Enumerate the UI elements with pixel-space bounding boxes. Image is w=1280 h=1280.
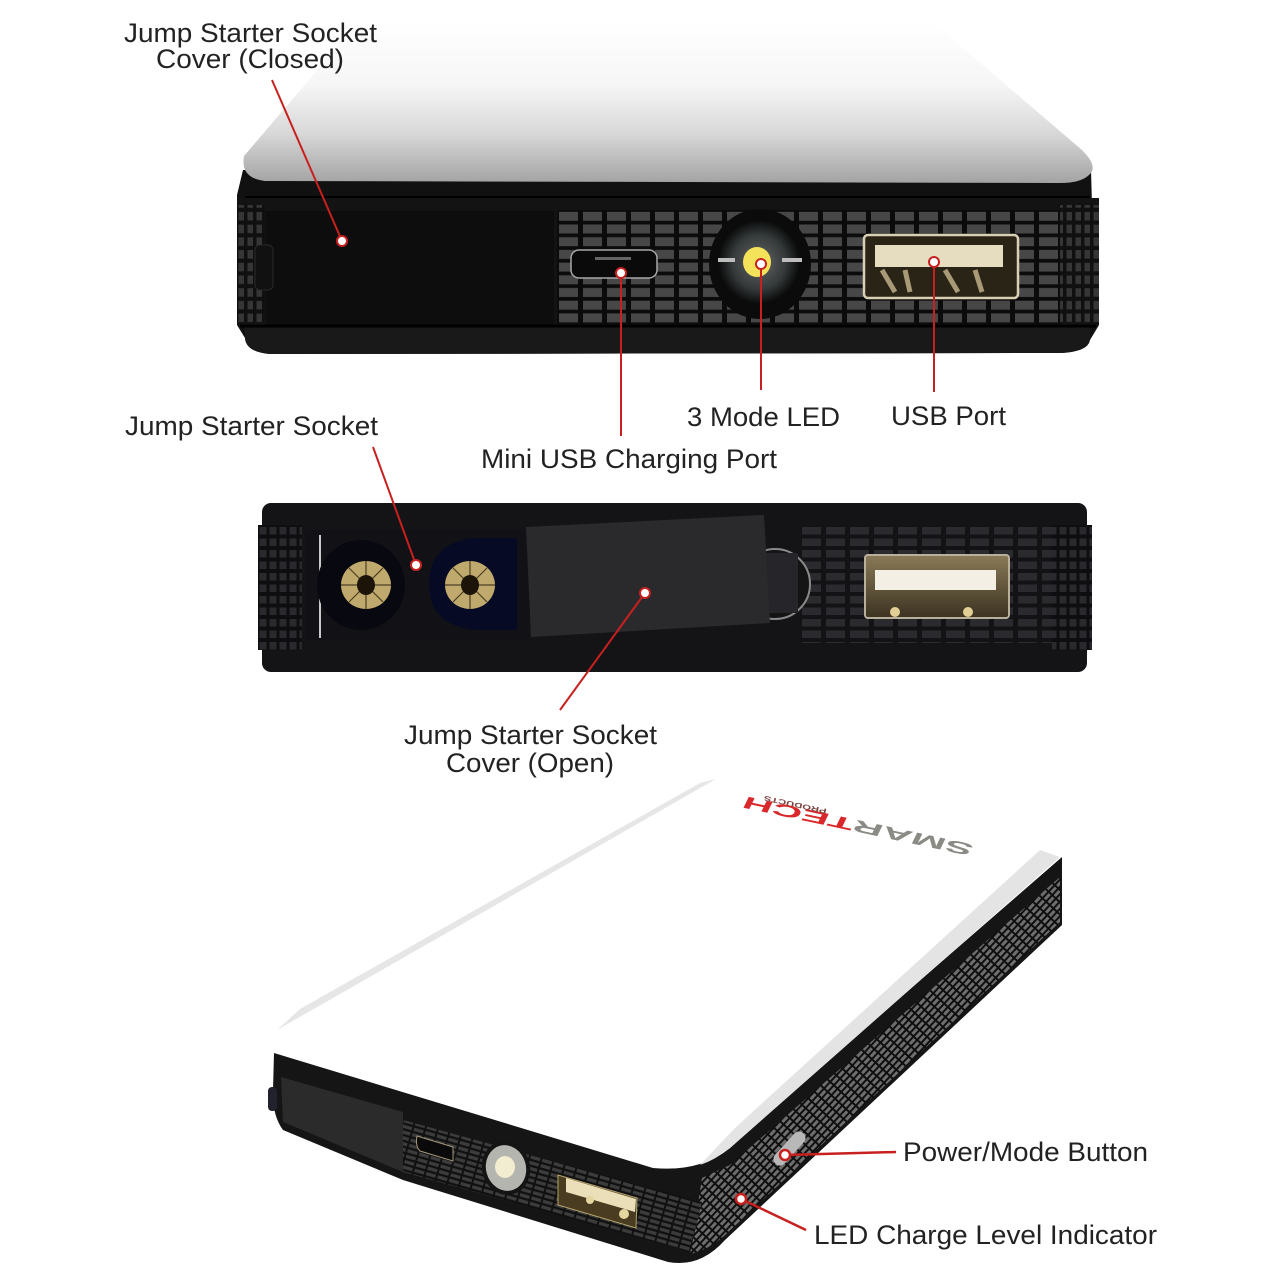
callout line: mini USB <box>616 268 626 436</box>
label: jump starter socket: Jump Starter Socket <box>125 411 379 441</box>
black body <box>273 857 1062 1263</box>
cover tab <box>255 245 273 290</box>
callout line: power button <box>780 1150 896 1160</box>
logo <box>739 793 977 860</box>
label: socket cover closed: Cover (Closed) <box>156 44 344 74</box>
label: mini USB: Mini USB Charging Port <box>481 444 778 474</box>
micro usb port <box>571 250 657 278</box>
label: socket cover open: Jump Starter Socket <box>404 720 658 750</box>
right gray edge strip <box>700 850 1060 1165</box>
lower bumper <box>245 326 1090 354</box>
label: socket cover closed: Jump Starter Socket <box>124 18 378 48</box>
LED lens <box>709 209 811 319</box>
USB port <box>864 235 1018 298</box>
front grille <box>403 1120 702 1252</box>
ribbed sides <box>258 525 302 650</box>
label: power button: Power/Mode Button <box>903 1137 1148 1167</box>
cover tab <box>268 1087 277 1111</box>
logo: SMARTECH <box>739 793 977 860</box>
body <box>262 503 1087 672</box>
device: front view open cover <box>258 503 1092 672</box>
right side grille <box>690 877 1060 1254</box>
grille <box>800 525 1052 643</box>
LED ring behind flap <box>740 549 810 619</box>
label: socket cover open: Cover (Open) <box>446 748 614 778</box>
LED <box>476 1136 536 1200</box>
socket recess <box>305 530 530 640</box>
callout line: LED <box>756 259 766 390</box>
right socket <box>429 538 517 630</box>
top surface of device <box>243 20 1093 183</box>
label: 3 mode LED: 3 Mode LED <box>687 402 840 432</box>
white top shell <box>275 778 1060 1167</box>
USB port <box>558 1175 637 1228</box>
label: socket cover open <box>404 720 658 778</box>
device: angled view <box>268 778 1062 1263</box>
callout line: cover open <box>560 588 650 710</box>
left socket <box>317 540 405 630</box>
micro usb <box>416 1136 453 1161</box>
label: LED charge indicator: LED Charge Level Indicator <box>814 1220 1157 1250</box>
grille <box>557 210 1060 324</box>
device: top view closed cover <box>237 20 1099 354</box>
textured side ribs <box>237 198 1099 325</box>
socket cover <box>281 1077 403 1172</box>
callout line: socket <box>373 447 421 570</box>
callout line: socket cover closed <box>272 80 347 246</box>
socket cover closed <box>266 211 554 325</box>
socket cover open <box>526 515 770 637</box>
left gray edge strip <box>277 779 716 1030</box>
callout line: charge indicator <box>736 1194 806 1230</box>
logo: PRODUCTS <box>763 794 827 814</box>
label: USB port: USB Port <box>891 401 1006 431</box>
label: socket cover closed <box>124 18 378 74</box>
bumper and body <box>237 170 1099 354</box>
USB port <box>865 555 1009 618</box>
power button <box>780 1138 799 1159</box>
callout line: USB port <box>929 257 939 392</box>
